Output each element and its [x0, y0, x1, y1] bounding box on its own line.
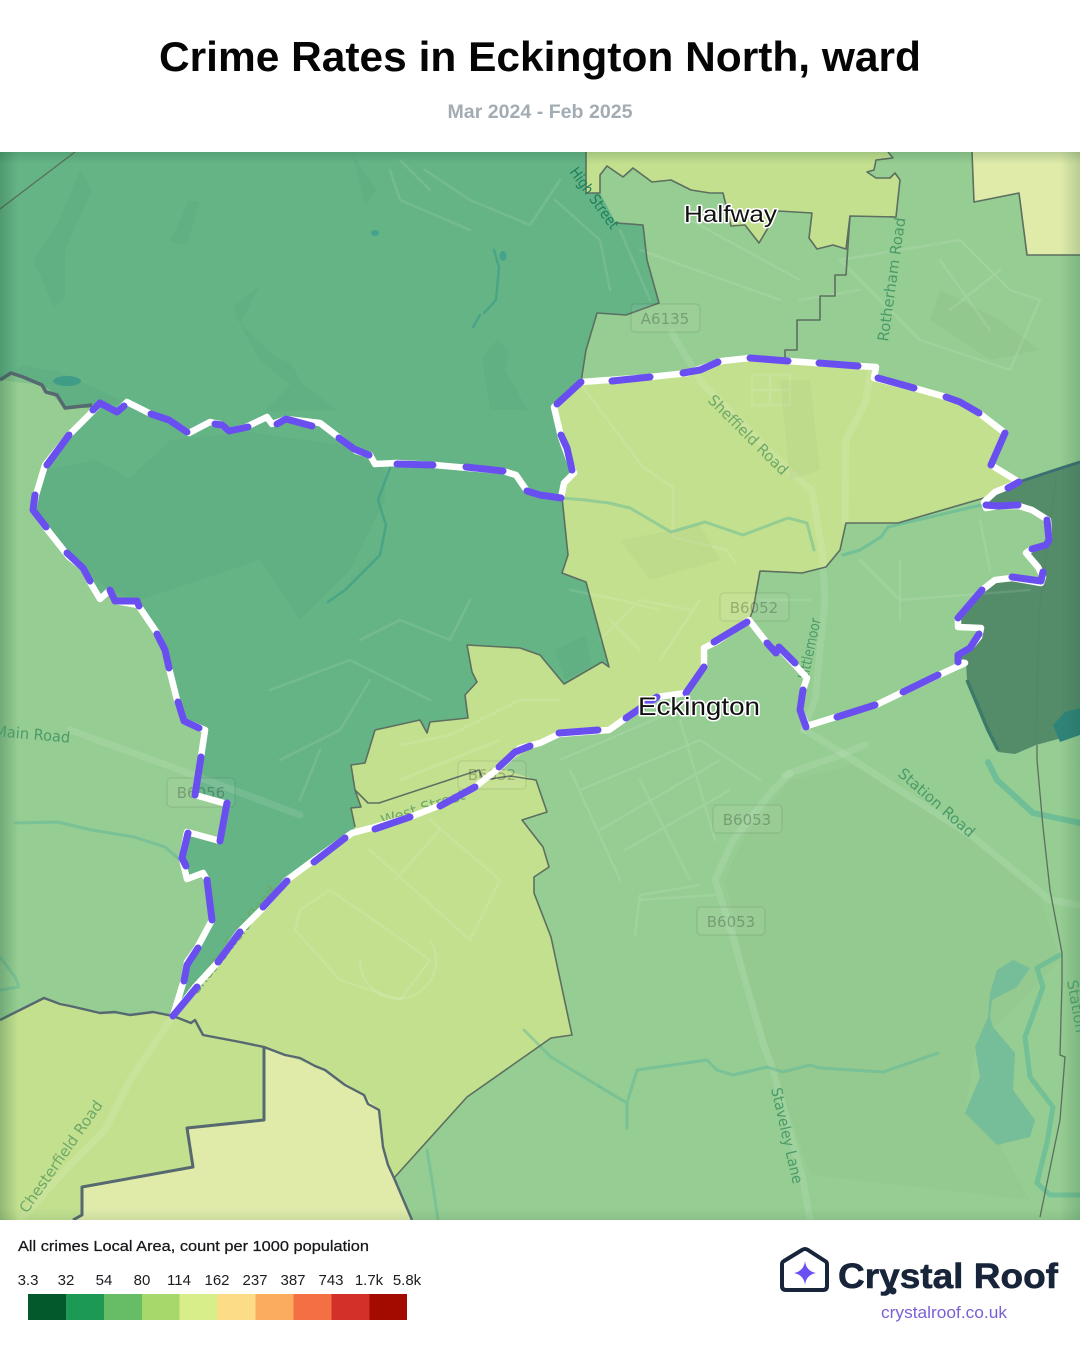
choropleth map — [0, 152, 1080, 1220]
subtitle: date range: Mar 2024 - Feb 2025 — [448, 102, 633, 123]
logo keyhole tail — [890, 1288, 896, 1294]
road labels: High Street — [566, 164, 623, 233]
legend scale values: 743 — [318, 1272, 344, 1289]
road labels: Sheffield Road — [704, 391, 792, 479]
title: Crime Rates in Eckington North, ward — [159, 33, 921, 80]
road labels — [0, 164, 1080, 1216]
area: pale yellow north-east — [972, 152, 1080, 255]
area: yellow green south-west — [0, 998, 264, 1220]
road shields — [167, 304, 789, 935]
area: yellow green north Halfway — [586, 152, 900, 249]
area: pale yellow south — [73, 1047, 412, 1220]
legend scale values: 1.7k — [355, 1272, 384, 1289]
woodland patches — [620, 290, 1040, 580]
roads and street pattern — [20, 160, 1080, 1220]
legend scale values: 114 — [167, 1272, 191, 1289]
road labels: Staveley Lane — [767, 1086, 807, 1185]
area: mid green north-west and ward — [0, 152, 659, 1016]
area: yellow green central ward — [351, 358, 1019, 833]
road shields: B6052 — [730, 599, 778, 617]
edge shading — [0, 152, 1080, 1220]
area: yellow green south of ward — [173, 768, 572, 1178]
ward boundary: white casing — [33, 358, 1049, 1016]
legend — [18, 1238, 422, 1320]
legend scale values: 237 — [242, 1272, 268, 1289]
ward boundary: purple dashes — [33, 358, 1049, 1016]
road shields: B6056 — [177, 784, 225, 802]
water: rivers and ponds — [0, 250, 1080, 1220]
legend scale values: 32 — [58, 1272, 74, 1289]
road shields: B6053 — [723, 811, 771, 829]
road shields: B6052 — [468, 766, 516, 784]
legend scale values: 3.3 — [18, 1272, 38, 1289]
legend colour swatches — [28, 1294, 407, 1320]
website url: crystalroof.co.uk — [881, 1303, 1008, 1322]
road shields: A6135 — [641, 310, 689, 328]
road shields: B6053 — [707, 913, 755, 931]
legend scale values: 54 — [96, 1272, 112, 1289]
ponds — [53, 230, 1080, 1145]
legend scale values: 387 — [280, 1272, 306, 1289]
icon: house with star — [782, 1249, 827, 1290]
road labels: Chesterfield Road — [16, 1097, 107, 1216]
logo wordmark: Crystal Roof — [838, 1257, 1058, 1296]
area: subtle woodland shading — [3, 375, 60, 402]
place label: Halfway: Halfway — [684, 201, 778, 227]
legend title: All crimes Local Area, count per 1000 population — [18, 1238, 369, 1255]
road labels: Rotherham Road — [874, 216, 909, 343]
road labels: West Street — [379, 786, 467, 830]
road labels: Station Road — [894, 764, 979, 841]
legend scale values: 162 — [204, 1272, 230, 1289]
district boundary lines — [0, 152, 1080, 1217]
road labels: Chesterfield Road — [185, 883, 281, 998]
legend scale values: 5.8k — [393, 1272, 422, 1289]
place label: Eckington: Eckington — [638, 693, 760, 721]
area: slightly darker fields between roads — [725, 765, 1060, 1200]
logo: Crystal Roof — [782, 1249, 1058, 1322]
road labels: Littlemoor — [794, 616, 825, 681]
map base: light green area — [0, 152, 1080, 1220]
legend scale values — [18, 1272, 422, 1289]
legend scale values: 80 — [134, 1272, 150, 1289]
area: dark green east — [958, 462, 1080, 754]
